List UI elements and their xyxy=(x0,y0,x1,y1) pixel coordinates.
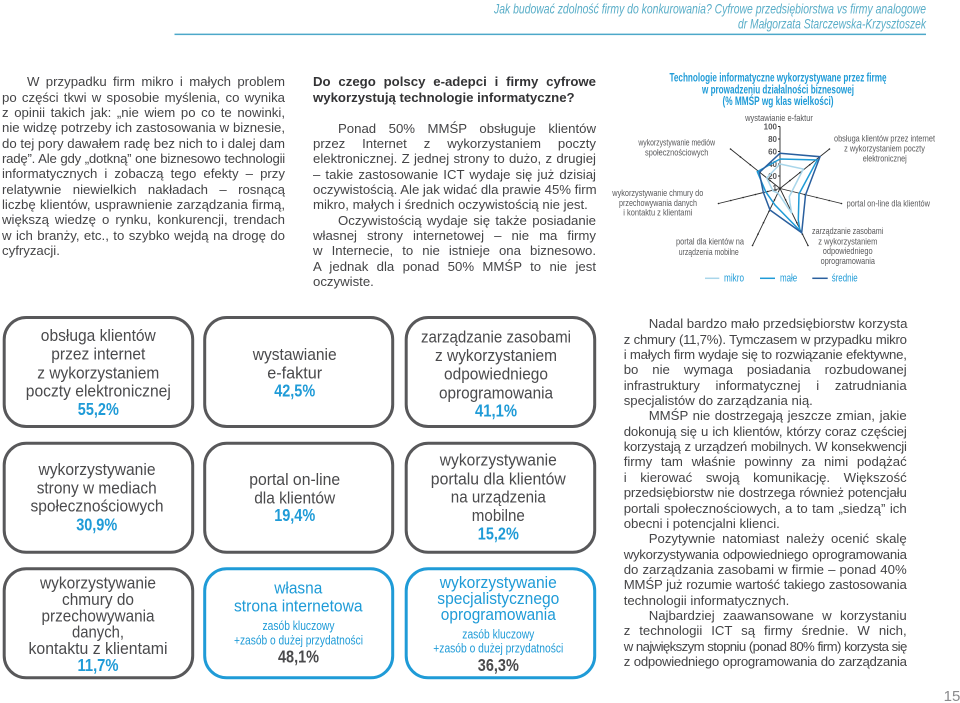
text block: left column: po części tkwi w sposobie myślenia, co wynika xyxy=(2,90,285,105)
radar chart: technologies by company size xyxy=(612,70,935,284)
box: portal na urządzenia mobilne 15,2%: wykorzystywanie xyxy=(439,451,557,470)
axis labels: wykorzystywanie chmury do xyxy=(612,188,703,199)
text block: right column: firmy tam właśnie powinny za nimi podążać xyxy=(624,454,907,469)
axis scale values: 40 xyxy=(768,160,778,169)
box: chmura 11,7% xyxy=(4,569,193,678)
box: obsługa klientów 55,2%: przez internet xyxy=(51,345,146,364)
box: obsługa klientów 55,2%: poczty elektronicznej xyxy=(26,382,171,401)
text block: right column: MMŚP już rozumie wartość takiego zastosowania xyxy=(624,577,907,592)
box: portal na urządzenia mobilne 15,2% xyxy=(406,443,595,552)
data series: średnie xyxy=(759,153,820,233)
box: chmura 11,7%: 11,7% xyxy=(78,655,119,675)
text block: middle column: Ponad 50% MMŚP obsługuje klientów xyxy=(338,121,596,136)
text block: right column: Pozytywnie natomiast należy ocenić skalę xyxy=(649,531,907,546)
box: wystawianie e-faktur 42,5%: e-faktur xyxy=(267,363,323,382)
box: portal na urządzenia mobilne 15,2%: portalu dla klientów xyxy=(431,469,566,488)
box: własna strona internetowa 48,1%: strona internetowa xyxy=(234,597,363,616)
box: zarządzanie zasobami 41,1%: odpowiedniego xyxy=(444,365,548,384)
text block: middle column: oczywistością. Ale jak widać dla prawie 45% firm xyxy=(313,182,597,197)
box: chmura 11,7%: przechowywania xyxy=(42,607,155,626)
text block: left column: większą wiedzę o rynku, konkurencji, trendach xyxy=(2,212,285,227)
text block: right column: do zarządzania zasobami w firmie – ponad 40% xyxy=(624,562,907,577)
text block: right column: dokonują się u ich klientów, którzy coraz częściej xyxy=(624,424,907,439)
box: specjalistyczne oprogramowanie 36,3%: zasób kluczowy xyxy=(462,628,535,642)
box: zarządzanie zasobami 41,1% xyxy=(406,318,595,426)
box: zarządzanie zasobami 41,1%: z wykorzystaniem xyxy=(435,346,557,365)
text block: middle column: A jednak dla ponad 50% MMŚP to nie jest xyxy=(313,259,596,274)
box: specjalistyczne oprogramowanie 36,3%: 36,3% xyxy=(478,655,519,675)
box: własna strona internetowa 48,1%: własna xyxy=(273,578,323,597)
box: specjalistyczne oprogramowanie 36,3%: specjalistycznego xyxy=(437,589,559,608)
axis labels: wystawianie e-faktur xyxy=(744,113,813,124)
text block: middle column: – takie zastosowanie ICT wydaje się już dzisiaj xyxy=(313,167,596,182)
text block: right column: i kierować swoją komunikację. Większość xyxy=(624,470,907,485)
axis labels: zarządzanie zasobami xyxy=(812,226,883,237)
text block: right column: Nadal bardzo mało przedsiębiorstw korzysta xyxy=(649,316,907,331)
text block: right column: bo nie wymaga posiadania rozbudowanej xyxy=(624,362,907,377)
text block: right column xyxy=(624,316,908,669)
box: portal on-line 19,4%: portal on-line xyxy=(249,470,340,489)
box: wystawianie e-faktur 42,5%: wystawianie xyxy=(252,345,337,364)
text block: right column: technologii informatycznych. xyxy=(624,593,789,608)
text block: middle column: oczywiste. xyxy=(313,274,374,289)
box: portal on-line 19,4% xyxy=(205,443,393,552)
text block: left column: do tej pory dawałem radę bez nich to i dalej dam xyxy=(2,136,285,151)
text block: right column: przedsiębiorstw nie dostrzega również potencjału xyxy=(624,485,907,500)
axis labels: z wykorzystaniem poczty xyxy=(844,144,925,155)
text block: right column: obecni i potencjalni klienci. xyxy=(624,516,780,531)
axis labels: elektronicznej xyxy=(863,154,907,165)
box: chmura 11,7%: chmury do xyxy=(62,590,134,609)
text block: middle column xyxy=(313,121,597,289)
axis labels: z wykorzystaniem xyxy=(818,236,877,247)
box: strona w mediach społecznościowych 30,9%: społecznościowych xyxy=(30,497,164,516)
text block: left column: informatycznych i zobaczą tego efekty – przy xyxy=(2,166,285,181)
axis labels: portal dla kientów na xyxy=(676,236,745,247)
text block: right column: z odpowiedniego oprogramowania do zarządzania xyxy=(624,654,907,669)
axis scale values xyxy=(764,122,778,193)
text block: right column: i małych firm wydaje się to rozwiązanie efektywne, xyxy=(624,347,907,362)
box: wystawianie e-faktur 42,5%: 42,5% xyxy=(274,381,316,401)
box: specjalistyczne oprogramowanie 36,3%: wykorzystywanie xyxy=(439,573,557,592)
text block: left column: radę”. Ale gdy „dotkną” one biznesowo technologii xyxy=(2,151,285,166)
chart title: w prowadzeniu działalności biznesowej xyxy=(701,82,854,96)
axis labels: społecznościowych xyxy=(645,148,708,159)
text block: right column: korzystają z urządzeń mobilnych. W konsekwencji xyxy=(624,439,907,454)
axis labels: oprogramowania xyxy=(821,256,875,267)
box: obsługa klientów 55,2% xyxy=(4,318,193,426)
axis labels: przechowywania danych xyxy=(619,198,697,209)
text block: left column: z opinii takich jak: „nie wiem po co te nowinki, xyxy=(2,105,285,120)
heading: middle column xyxy=(313,74,596,105)
box: zarządzanie zasobami 41,1%: zarządzanie zasobami xyxy=(421,328,571,347)
box: chmura 11,7%: wykorzystywanie xyxy=(39,574,156,593)
text block: right column: z chmury (11,7%). Tymczasem w przypadku mikro xyxy=(624,332,907,347)
box: obsługa klientów 55,2%: 55,2% xyxy=(78,399,119,419)
box: obsługa klientów 55,2%: z wykorzystaniem xyxy=(37,363,159,382)
legend xyxy=(705,272,858,284)
box: wystawianie e-faktur 42,5% xyxy=(205,318,393,426)
data series: mikro xyxy=(767,164,803,213)
box: własna strona internetowa 48,1%: 48,1% xyxy=(278,647,319,667)
box: portal na urządzenia mobilne 15,2%: mobilne xyxy=(472,506,525,525)
box: strona w mediach społecznościowych 30,9%: 30,9% xyxy=(76,515,118,535)
data series: małe xyxy=(757,159,817,231)
box: portal on-line 19,4%: dla klientów xyxy=(254,488,336,507)
text block: right column: z technologii ICT są firmy średnie. W nich, xyxy=(624,623,907,638)
text block: left column: liczbę klientów, usprawnienie zarządzania firmą, xyxy=(2,197,285,212)
box: obsługa klientów 55,2%: obsługa klientów xyxy=(41,326,156,345)
axis scale values: 1 xyxy=(773,184,778,193)
box: strona w mediach społecznościowych 30,9%: wykorzystywanie xyxy=(38,460,156,479)
text block: right column: wykorzystywania odpowiedniego oprogramowania xyxy=(624,547,907,562)
box: strona w mediach społecznościowych 30,9%: strony w mediach xyxy=(37,478,157,497)
text block: right column: w największym stopniu (ponad 80% firm) korzysta się xyxy=(624,639,907,654)
axis scale values: 60 xyxy=(768,148,778,156)
text block: left column: relatywnie niewielkich nakładach – rosnącą xyxy=(2,182,285,197)
box: specjalistyczne oprogramowanie 36,3% xyxy=(406,569,595,678)
header: running title and author xyxy=(174,0,927,36)
box: zarządzanie zasobami 41,1%: oprogramowania xyxy=(439,383,553,402)
text block: middle column: mikro, małych i średnich oczywistością nie jest. xyxy=(313,197,588,212)
box: chmura 11,7%: kontaktu z klientami xyxy=(28,639,168,658)
text block: right column: portali społecznościowych, a to tam „siedzą” ich xyxy=(624,501,907,516)
legend: małe xyxy=(780,272,797,284)
axis labels: odpowiedniego xyxy=(823,246,873,257)
axis labels: urządzenia mobilne xyxy=(679,247,739,258)
box: chmura 11,7%: danych, xyxy=(72,622,124,641)
box: portal na urządzenia mobilne 15,2%: na urządzenia xyxy=(451,488,546,507)
box: specjalistyczne oprogramowanie 36,3%: oprogramowania xyxy=(441,605,556,624)
text block: right column: infrastruktury informatycznej i zatrudniania xyxy=(624,378,907,393)
legend: mikro xyxy=(724,272,744,284)
legend: średnie xyxy=(832,272,858,284)
axis scale values: 80 xyxy=(768,135,778,144)
text block: middle column: przez Internet z wykorzystaniem poczty xyxy=(313,136,596,151)
heading: middle column: Do czego polscy e-adepci i firmy cyfrowe xyxy=(313,74,596,89)
radar axes xyxy=(718,126,842,246)
box: własna strona internetowa 48,1% xyxy=(205,569,393,678)
box: portal na urządzenia mobilne 15,2%: 15,2% xyxy=(478,523,519,543)
text block: left column: nie widzę potrzeby ich zastosowania w biznesie, xyxy=(2,120,285,135)
box: portal on-line 19,4%: 19,4% xyxy=(274,505,316,525)
box: własna strona internetowa 48,1%: zasób kluczowy xyxy=(262,619,335,633)
axis labels: wykorzystywanie mediów xyxy=(638,137,715,148)
box: specjalistyczne oprogramowanie 36,3%: +zasób o dużej przydatności xyxy=(433,642,563,656)
text block: middle column: w Internecie, to nie istnieje ona biznesowo. xyxy=(313,243,596,258)
axis scale values: 20 xyxy=(768,172,778,181)
axis labels: portal on-line dla klientów xyxy=(847,199,930,210)
text block: middle column: Oczywistością wydaje się także posiadanie xyxy=(338,213,596,228)
text block: middle column: elektronicznej. Z jednej strony to dużo, z drugiej xyxy=(313,151,596,166)
chart title: (% MMŚP wg klas wielkości) xyxy=(722,93,834,108)
text block: middle column: własnej strony internetowej – nie ma firmy xyxy=(313,228,596,243)
box: strona w mediach społecznościowych 30,9% xyxy=(4,443,193,552)
text block: right column: Najbardziej zaawansowane w korzystaniu xyxy=(649,608,907,623)
text block: left column: W przypadku firm mikro i małych problem xyxy=(27,74,285,89)
text block: left column xyxy=(2,74,285,258)
text block: left column: cyfryzacji. xyxy=(2,243,60,258)
box: zarządzanie zasobami 41,1%: 41,1% xyxy=(475,401,517,421)
axis tick dots xyxy=(718,148,842,246)
text block: right column: MMŚP nie dostrzegają jeszcze zmian, jakie xyxy=(649,408,907,423)
text block: right column: specjalistów do zarządzania nią. xyxy=(624,393,813,408)
axis labels xyxy=(612,113,935,267)
axis scale values: 100 xyxy=(764,122,778,132)
text block: left column: w ich branży, etc., to szybko wejdą na drogę do xyxy=(2,228,285,243)
box: własna strona internetowa 48,1%: +zasób o dużej przydatności xyxy=(234,633,363,647)
axis labels: i kontaktu z klientami xyxy=(623,208,692,219)
heading: middle column: wykorzystują technologie informatyczne? xyxy=(313,90,575,105)
chart title xyxy=(670,70,887,108)
